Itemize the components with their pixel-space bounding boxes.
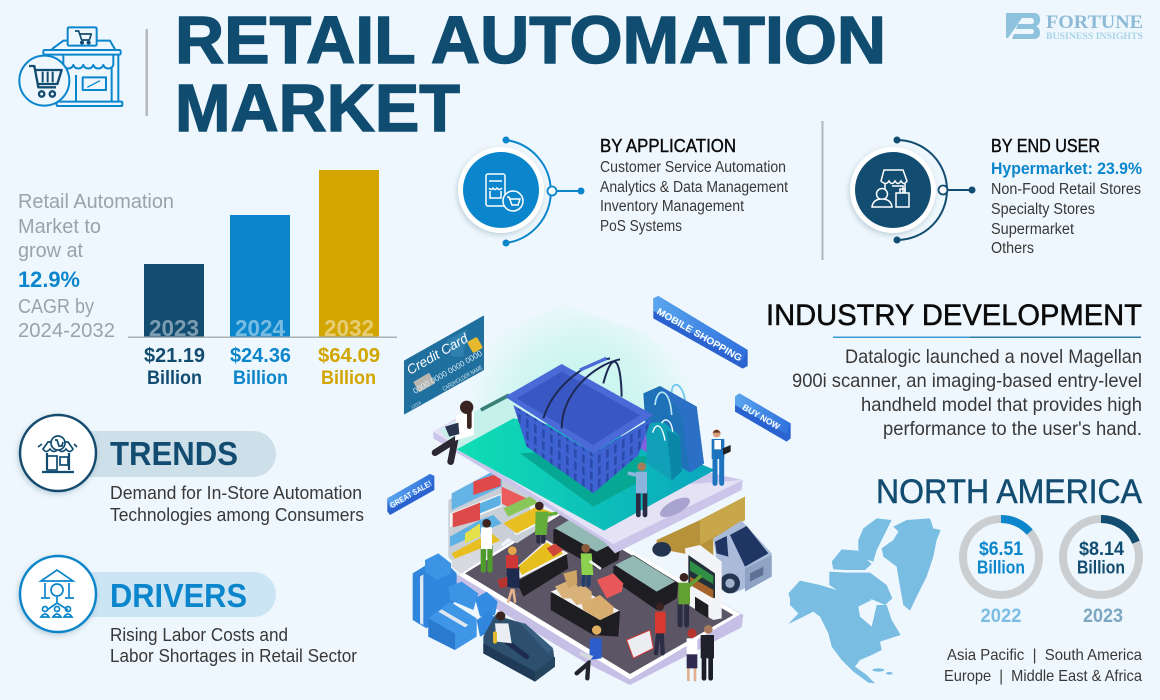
title: RETAIL AUTOMATION <box>175 3 886 78</box>
logo: Fortune Business Insights <box>1006 12 1143 42</box>
panel: drivers: DRIVERS <box>110 577 247 614</box>
heading: north america: NORTH AMERICA <box>876 473 1142 511</box>
donut: 2023: Billion <box>1077 556 1125 578</box>
cardboard blue boxes <box>413 553 498 650</box>
bar chart: market size by year: $21.19 <box>144 345 205 367</box>
text: application list <box>600 136 789 235</box>
bar chart: market size by year <box>128 170 397 389</box>
text: drivers description: Labor Shortages in Retail Sector <box>110 645 357 666</box>
text: CAGR callout: Market to <box>18 215 101 238</box>
bar chart: market size by year: $24.36 <box>230 345 291 367</box>
bar chart: market size by year: 2032 <box>324 315 374 341</box>
text: CAGR callout: Retail Automation <box>18 190 174 213</box>
bar chart: market size by year: Billion <box>147 367 202 389</box>
donut: 2023: $8.14 <box>1079 539 1124 560</box>
text: end user list: Specialty Stores <box>991 201 1095 218</box>
bar chart: market size by year: 2024 <box>235 315 285 341</box>
tag: buy now: BUY NOW <box>741 402 782 432</box>
text: development description: Datalogic launched a novel Magellan <box>845 346 1142 368</box>
credit card <box>404 315 484 415</box>
panel: trends <box>20 415 364 525</box>
delivery truck <box>652 497 772 593</box>
panel: by application <box>458 136 789 246</box>
text: CAGR callout: 12.9% <box>18 267 80 292</box>
text: other regions <box>944 647 1142 685</box>
upper phone <box>433 393 743 553</box>
text: development description: performance to the user's hand. <box>883 418 1142 440</box>
donut: 2022: Billion <box>977 556 1025 578</box>
illustration: isometric retail automation scene <box>387 296 791 685</box>
shopping bags <box>638 385 704 481</box>
icon: retail store with cart <box>19 27 122 106</box>
panel: trends: TRENDS <box>110 435 238 472</box>
text: trends description: Technologies among Consumers <box>110 504 364 525</box>
text: development description: 900i scanner, an imaging-based entry-level <box>792 370 1142 392</box>
tag: mobile shopping: MOBILE SHOPPING <box>654 306 744 364</box>
tag: mobile shopping <box>653 296 748 369</box>
vending machine <box>685 545 722 620</box>
icon: trends store <box>20 415 96 491</box>
logo: Fortune Business Insights: BUSINESS INSIGHTS <box>1046 32 1143 42</box>
text: end user list: Supermarket <box>991 221 1075 238</box>
text: drivers description <box>110 624 357 666</box>
bar chart: market size by year: $64.09 <box>318 345 380 367</box>
tag: great sale: GREAT SALE! <box>388 479 433 510</box>
text: development description <box>792 346 1142 440</box>
bar chart: market size by year: 2023 <box>149 315 199 341</box>
text: trends description: Demand for In-Store Automation <box>110 482 362 503</box>
people <box>435 401 731 680</box>
donut: 2022: $6.51 <box>979 539 1023 560</box>
store shelves <box>448 467 555 573</box>
text: drivers description: Rising Labor Costs and <box>110 624 288 645</box>
icon: shopper store badge <box>850 136 976 244</box>
map: north america <box>788 518 941 683</box>
panel: by end user <box>850 136 1142 257</box>
text: CAGR callout: grow at <box>18 239 83 262</box>
lower phone floor <box>455 510 743 685</box>
freezers and produce tables <box>515 519 678 637</box>
donut: 2023 <box>1063 519 1139 627</box>
donut: 2022 <box>963 519 1039 627</box>
panel: industry development: INDUSTRY DEVELOPMENT <box>766 299 1142 332</box>
sofa <box>483 615 555 682</box>
icon: mobile shop badge <box>458 136 584 246</box>
text: trends description <box>110 482 364 525</box>
panel: industry development <box>766 299 1142 440</box>
credit card: 12/24 <box>410 400 422 410</box>
text: end user list: Non-Food Retail Stores <box>991 181 1141 198</box>
text: development description: handheld model that provides high <box>861 394 1142 416</box>
tag: buy now <box>735 393 791 442</box>
text: end user list <box>991 136 1142 257</box>
text: end user list: Hypermarket: 23.9% <box>991 160 1142 178</box>
title <box>175 3 886 146</box>
text: CAGR callout: CAGR by <box>18 295 95 318</box>
text: other regions: Asia Pacific | South America <box>947 647 1142 664</box>
light beam <box>427 303 753 543</box>
text: end user list: BY END USER <box>991 136 1100 156</box>
text: application list: Analytics & Data Management <box>600 179 789 196</box>
text: end user list: Others <box>991 240 1034 257</box>
credit card: CARDHOLDER NAME <box>442 365 484 393</box>
icon: drivers bank <box>20 556 96 632</box>
credit card: Credit Card <box>404 330 471 378</box>
title: MARKET <box>175 71 460 146</box>
text: CAGR callout <box>18 190 174 342</box>
text: other regions: Europe | Middle East & Africa <box>944 668 1142 685</box>
donut: 2022: 2022 <box>980 606 1022 627</box>
logo: Fortune Business Insights: FORTUNE <box>1046 12 1143 33</box>
text: CAGR callout: 2024-2032 <box>18 319 115 342</box>
bar chart: market size by year: Billion <box>233 367 288 389</box>
bar chart: market size by year: Billion <box>321 367 376 389</box>
panel: drivers <box>20 556 357 666</box>
text: application list: PoS Systems <box>600 218 682 235</box>
text: application list: Inventory Management <box>600 198 745 215</box>
text: application list: Customer Service Automation <box>600 159 786 176</box>
credit card: 0000 0000 0000 0000 <box>411 348 484 396</box>
shopping basket <box>505 358 653 493</box>
text: application list: BY APPLICATION <box>600 136 736 156</box>
donut: 2023: 2023 <box>1083 606 1123 627</box>
